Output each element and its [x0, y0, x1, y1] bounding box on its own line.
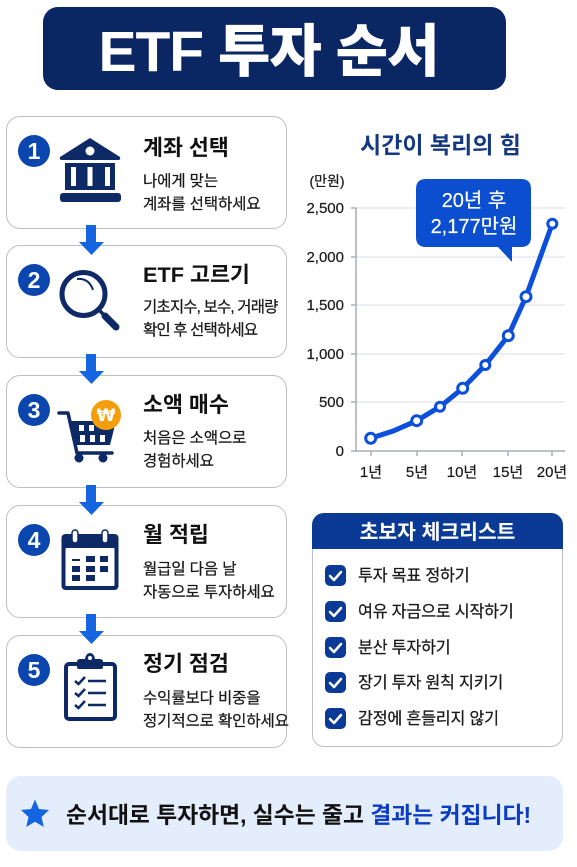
check item 1: 투자 목표 정하기 — [358, 567, 469, 585]
step 2 description: 확인 후 선택하세요 — [143, 322, 257, 339]
check item 3: 분산 투자하기 — [358, 639, 450, 657]
step 1 description: 나에게 맞는 — [143, 173, 218, 190]
check item 5: 감정에 흔들리지 않기 — [358, 710, 499, 728]
data points — [366, 219, 557, 443]
step 1 description: 계좌를 선택하세요 — [143, 196, 260, 213]
step 2 badge: 2 — [28, 267, 40, 293]
y axis labels: 500 — [319, 394, 344, 411]
data line — [371, 224, 552, 438]
step 3 title: 소액 매수 — [143, 392, 229, 417]
footer message: 순서대로 투자하면, 실수는 줄고 결과는 커집니다! — [66, 802, 531, 828]
title banner: ETF 투자 순서 — [98, 20, 439, 84]
x axis labels: 20년 — [537, 464, 567, 481]
x axis labels: 10년 — [447, 464, 477, 481]
icon: clipboard checklist — [64, 653, 117, 721]
step 4 description — [143, 560, 275, 601]
checklist header: 초보자 체크리스트 — [360, 522, 515, 544]
x axis labels — [360, 464, 567, 481]
step 2 description: 기초지수, 보수, 거래량 — [143, 299, 278, 316]
check icon 1 — [325, 565, 346, 586]
icon: shopping cart with won coin: ₩ — [97, 406, 116, 426]
step 1 description — [143, 173, 260, 213]
step 3 badge: 3 — [28, 397, 40, 423]
check icon 4 — [325, 672, 346, 693]
step 5 title: 정기 점검 — [143, 651, 229, 676]
icon: bank — [60, 138, 121, 202]
icon: star — [21, 800, 49, 827]
step 4 title: 월 적립 — [143, 522, 209, 547]
step 2 description — [143, 298, 278, 339]
x axis labels: 1년 — [360, 464, 382, 481]
icon: calendar — [62, 529, 118, 590]
step 4 badge — [18, 524, 50, 556]
step 5 description: 수익률보다 비중을 — [143, 690, 260, 707]
arrow 4 to 5 — [79, 614, 104, 644]
step 2 card — [6, 245, 287, 358]
step 2 badge — [18, 264, 50, 296]
y axis labels: 2,000 — [306, 249, 344, 266]
step 5 badge: 5 — [28, 657, 40, 683]
step 1 badge — [18, 135, 50, 167]
check item 2: 여유 자금으로 시작하기 — [358, 603, 514, 621]
step 4 card — [6, 505, 287, 618]
step 5 badge — [18, 654, 50, 686]
unit label: (만원) — [309, 173, 345, 189]
step 3 description: 경험하세요 — [143, 453, 214, 470]
y axis labels: 1,000 — [306, 346, 344, 363]
arrow 1 to 2 — [79, 225, 104, 255]
checklist header — [312, 513, 563, 549]
callout bubble: 20년 후 — [442, 189, 506, 212]
icon: shopping cart with won coin — [57, 400, 121, 462]
step 3 card — [6, 375, 287, 488]
step 1 card — [6, 116, 287, 229]
step 2 title: ETF 고르기 — [143, 262, 250, 287]
footer banner — [6, 776, 563, 851]
step 4 description: 자동으로 투자하세요 — [143, 584, 275, 601]
step 5 description: 정기적으로 확인하세요 — [143, 713, 289, 730]
step 4 description: 월급일 다음 날 — [143, 561, 236, 578]
check item 4: 장기 투자 원칙 지키기 — [358, 674, 503, 692]
chart heading: 시간이 복리의 힘 — [360, 132, 521, 158]
arrow 3 to 4 — [79, 485, 104, 515]
step 5 card — [6, 635, 287, 748]
check icon 5 — [325, 708, 346, 729]
check icon 3 — [325, 637, 346, 658]
y axis labels — [306, 200, 344, 460]
check icon 2 — [325, 601, 346, 622]
icon: magnifier — [60, 270, 120, 330]
y axis labels: 1,500 — [306, 297, 344, 314]
step 1 badge: 1 — [28, 138, 40, 164]
step 3 badge — [18, 394, 50, 426]
line chart — [306, 173, 567, 481]
x axis labels: 15년 — [493, 464, 523, 481]
step 3 description: 처음은 소액으로 — [143, 430, 246, 447]
step 5 description — [143, 690, 289, 730]
arrow 2 to 3 — [79, 354, 104, 384]
step 3 description — [143, 430, 246, 470]
callout bubble — [416, 179, 531, 262]
y axis labels: 2,500 — [306, 200, 344, 217]
step 1 title: 계좌 선택 — [143, 135, 229, 160]
x axis labels: 5년 — [406, 464, 428, 481]
title banner — [43, 7, 506, 90]
step 4 badge: 4 — [28, 527, 40, 553]
y axis labels: 0 — [336, 443, 344, 460]
panel: beginner checklist — [312, 513, 563, 747]
callout bubble: 2,177만원 — [431, 215, 517, 238]
